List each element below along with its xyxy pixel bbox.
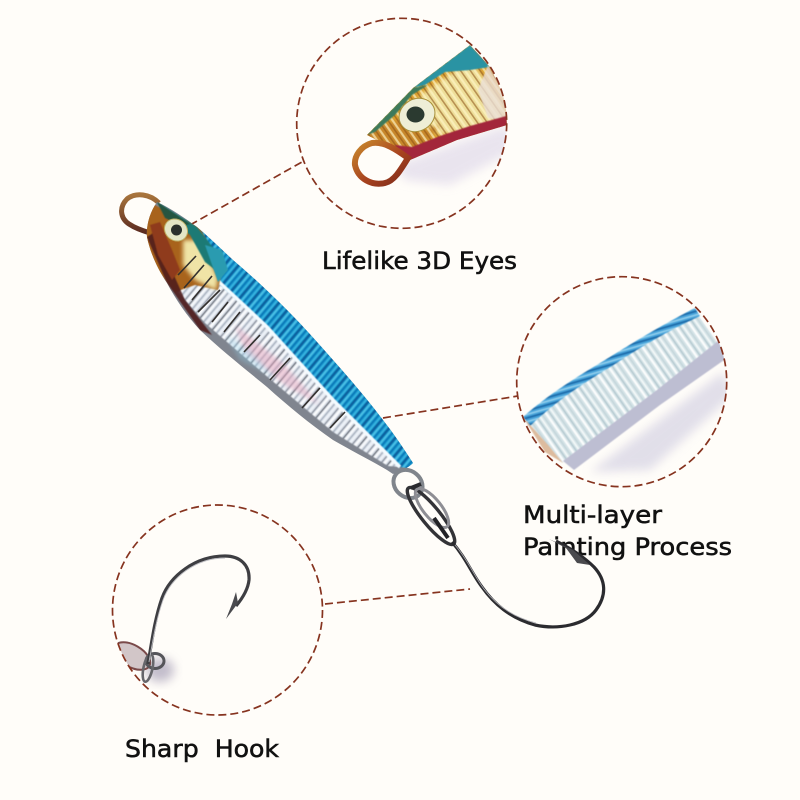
leader line: paint bbox=[383, 396, 518, 418]
eyelet and hook close-up bbox=[109, 556, 249, 683]
head loop bbox=[122, 195, 159, 233]
label: Sharp Hook: Sharp Hook bbox=[125, 735, 279, 763]
label: Multi-layer Painting Process: Multi-layer bbox=[523, 501, 662, 529]
hook barb and tip bbox=[549, 539, 590, 565]
main hook assembly bbox=[388, 464, 604, 627]
white midline bbox=[218, 281, 400, 467]
hook bbox=[452, 541, 604, 627]
main lure bbox=[119, 192, 413, 474]
panel: 3D eyes close-up bbox=[297, 18, 515, 228]
head colour bbox=[146, 204, 221, 292]
label: Multi-layer Painting Process bbox=[523, 501, 732, 561]
silver flank bbox=[179, 284, 398, 468]
blue back bbox=[198, 225, 420, 470]
panel: hook close-up bbox=[109, 505, 322, 715]
dark gill streaks bbox=[178, 256, 345, 428]
label: Multi-layer Painting Process: Painting Process bbox=[523, 533, 732, 561]
dashed circle bbox=[112, 505, 322, 715]
dashed circle bbox=[297, 18, 507, 228]
leader line: hook bbox=[325, 589, 470, 604]
iridescent patches bbox=[235, 325, 320, 405]
eye bbox=[160, 215, 192, 245]
eye close-up bbox=[393, 92, 441, 138]
split ring bbox=[388, 464, 428, 504]
lure body close-up bbox=[523, 308, 733, 472]
swivel rings bbox=[401, 482, 461, 550]
panel: painting close-up bbox=[517, 277, 733, 487]
lure body bbox=[146, 202, 413, 474]
leader line: eyes bbox=[190, 162, 302, 225]
lure head close-up bbox=[367, 45, 507, 186]
dashed circle bbox=[517, 277, 727, 487]
label: Lifelike 3D Eyes: Lifelike 3D Eyes bbox=[322, 247, 517, 275]
loop ring close-up bbox=[355, 143, 408, 184]
